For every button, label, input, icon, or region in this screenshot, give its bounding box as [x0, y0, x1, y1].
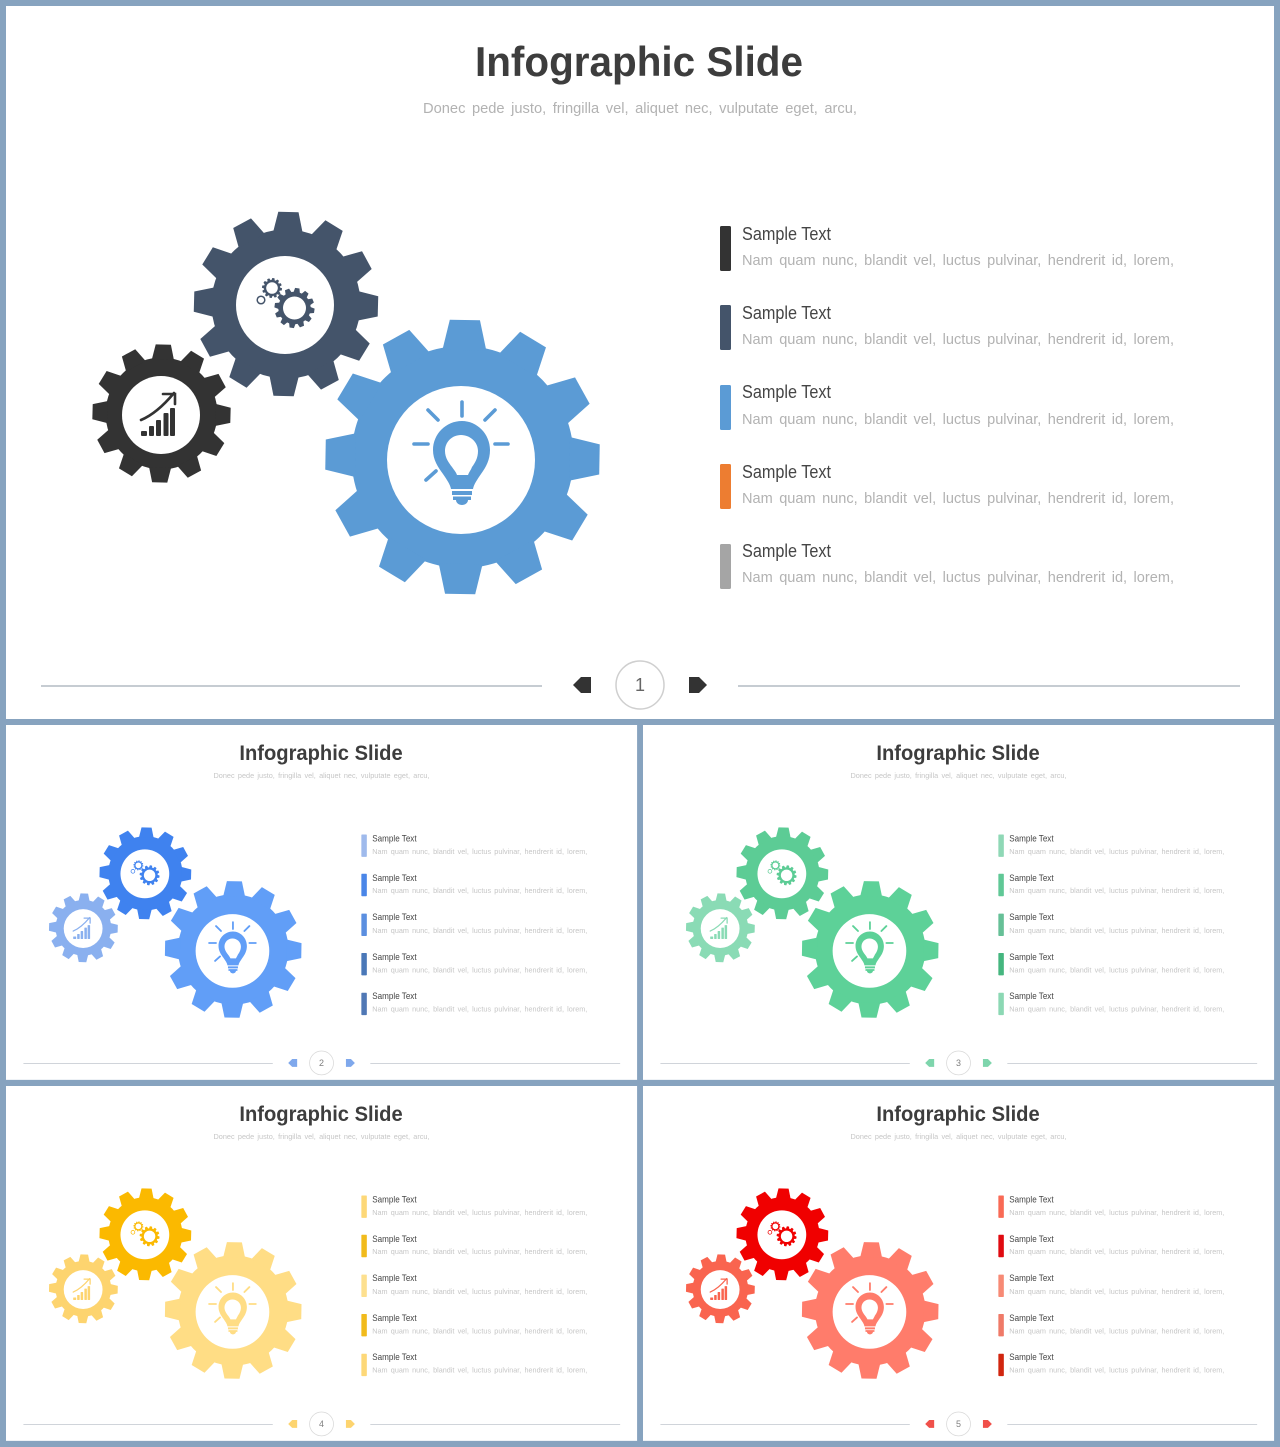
label: Sample Text	[372, 873, 417, 883]
icon: lightbulb	[846, 922, 893, 973]
icon: lightbulb	[209, 1283, 256, 1334]
description: Nam quam nunc, blandit vel, luctus pulvinar, hendrerit id, lorem,	[372, 1005, 587, 1014]
icon: growth chart	[73, 1279, 90, 1300]
panel: slide 1	[6, 6, 1274, 719]
description: Nam quam nunc, blandit vel, luctus pulvinar, hendrerit id, lorem,	[372, 965, 587, 974]
label: Sample Text	[1009, 991, 1054, 1001]
gear: cogs, medium	[735, 1187, 829, 1281]
label: Sample Text	[742, 382, 831, 402]
bar	[998, 1275, 1004, 1297]
description: Nam quam nunc, blandit vel, luctus pulvinar, hendrerit id, lorem,	[1009, 1366, 1224, 1375]
page number: 4	[319, 1419, 324, 1429]
gear: chart, small	[685, 893, 756, 963]
list item 4	[720, 462, 1174, 509]
icon: cogs	[768, 1221, 798, 1248]
bar	[361, 953, 367, 975]
gear: lightbulb, large	[164, 880, 303, 1019]
gear: cogs, medium	[735, 826, 829, 920]
label: Sample Text	[372, 1352, 417, 1362]
bar	[361, 1354, 367, 1376]
page number	[947, 1412, 970, 1436]
bar	[998, 874, 1004, 896]
icon: growth chart	[710, 1279, 727, 1300]
label: Sample Text	[372, 952, 417, 962]
list item 2	[361, 1234, 587, 1257]
list item 4	[998, 1313, 1224, 1336]
list item 5	[998, 1352, 1224, 1376]
bar	[998, 1235, 1004, 1257]
gear: lightbulb, large	[323, 318, 602, 596]
description: Nam quam nunc, blandit vel, luctus pulvinar, hendrerit id, lorem,	[742, 252, 1174, 269]
arrow: next	[689, 677, 707, 693]
title: Infographic Slide	[475, 38, 803, 85]
gear: lightbulb, large	[801, 1241, 940, 1380]
icon: growth chart	[710, 918, 727, 939]
panel: slide 3 green	[643, 725, 1274, 1080]
subtitle: Donec pede justo, fringilla vel, aliquet nec, vulputate eget, arcu,	[423, 100, 857, 117]
label: Sample Text	[1009, 873, 1054, 883]
bar	[998, 1195, 1004, 1218]
subtitle: Donec pede justo, fringilla vel, aliquet nec, vulputate eget, arcu,	[214, 771, 430, 780]
icon: cogs	[257, 277, 317, 331]
list item 1	[998, 1194, 1224, 1218]
icon: lightbulb	[846, 1283, 893, 1334]
description: Nam quam nunc, blandit vel, luctus pulvinar, hendrerit id, lorem,	[1009, 1005, 1224, 1014]
icon: growth chart	[73, 918, 90, 939]
icon: cogs	[131, 860, 161, 887]
label: Sample Text	[1009, 912, 1054, 922]
arrow: next	[346, 1059, 355, 1067]
description: Nam quam nunc, blandit vel, luctus pulvinar, hendrerit id, lorem,	[372, 926, 587, 935]
gear: chart, small	[48, 1254, 119, 1324]
list item 3	[720, 382, 1174, 430]
description: Nam quam nunc, blandit vel, luctus pulvinar, hendrerit id, lorem,	[742, 569, 1174, 586]
subtitle: Donec pede justo, fringilla vel, aliquet nec, vulputate eget, arcu,	[851, 1132, 1067, 1141]
description: Nam quam nunc, blandit vel, luctus pulvinar, hendrerit id, lorem,	[1009, 926, 1224, 935]
list item 2	[361, 873, 587, 896]
icon: growth chart	[141, 393, 175, 436]
list item 1	[361, 833, 587, 857]
label: Sample Text	[372, 1194, 417, 1204]
title: Infographic Slide	[239, 1103, 403, 1126]
description: Nam quam nunc, blandit vel, luctus pulvinar, hendrerit id, lorem,	[742, 331, 1174, 348]
bar	[361, 993, 367, 1015]
label: Sample Text	[372, 833, 417, 843]
page number: 3	[956, 1058, 961, 1068]
label: Sample Text	[742, 303, 831, 323]
bar	[720, 464, 731, 509]
gear: cogs, medium	[98, 826, 192, 920]
bar	[361, 1235, 367, 1257]
list item 5	[998, 991, 1224, 1015]
list item 5	[720, 541, 1174, 589]
description: Nam quam nunc, blandit vel, luctus pulvinar, hendrerit id, lorem,	[372, 1326, 587, 1335]
bar	[361, 1195, 367, 1218]
panel: slide 5 red	[643, 1086, 1274, 1441]
description: Nam quam nunc, blandit vel, luctus pulvinar, hendrerit id, lorem,	[742, 411, 1174, 428]
gear: chart, small	[685, 1254, 756, 1324]
bar	[998, 834, 1004, 857]
list item 5	[361, 1352, 587, 1376]
label: Sample Text	[1009, 1273, 1054, 1283]
page number: 5	[956, 1419, 961, 1429]
bar	[998, 953, 1004, 975]
bar	[998, 993, 1004, 1015]
description: Nam quam nunc, blandit vel, luctus pulvinar, hendrerit id, lorem,	[1009, 1287, 1224, 1296]
label: Sample Text	[1009, 1234, 1054, 1244]
description: Nam quam nunc, blandit vel, luctus pulvinar, hendrerit id, lorem,	[372, 847, 587, 856]
page number	[310, 1412, 333, 1436]
gear: chart, small	[91, 343, 232, 484]
panel: slide 4 yellow	[6, 1086, 637, 1441]
description: Nam quam nunc, blandit vel, luctus pulvinar, hendrerit id, lorem,	[372, 1247, 587, 1256]
subtitle: Donec pede justo, fringilla vel, aliquet nec, vulputate eget, arcu,	[851, 771, 1067, 780]
description: Nam quam nunc, blandit vel, luctus pulvinar, hendrerit id, lorem,	[1009, 1208, 1224, 1217]
label: Sample Text	[1009, 833, 1054, 843]
icon: lightbulb	[414, 402, 508, 505]
label: Sample Text	[372, 991, 417, 1001]
label: Sample Text	[1009, 952, 1054, 962]
bar	[720, 544, 731, 589]
label: Sample Text	[372, 1234, 417, 1244]
list item 1	[720, 224, 1174, 271]
arrow: next	[983, 1059, 992, 1067]
gear: cogs, medium	[98, 1187, 192, 1281]
list item 4	[361, 952, 587, 975]
list item 1	[361, 1194, 587, 1218]
description: Nam quam nunc, blandit vel, luctus pulvinar, hendrerit id, lorem,	[1009, 1326, 1224, 1335]
icon: lightbulb	[209, 922, 256, 973]
gear: cogs, medium	[192, 210, 380, 398]
icon: cogs	[131, 1221, 161, 1248]
label: Sample Text	[372, 1273, 417, 1283]
description: Nam quam nunc, blandit vel, luctus pulvinar, hendrerit id, lorem,	[1009, 1247, 1224, 1256]
arrow: previous	[925, 1059, 934, 1067]
bar	[720, 385, 731, 430]
page number	[616, 661, 664, 709]
bar	[998, 1354, 1004, 1376]
label: Sample Text	[1009, 1194, 1054, 1204]
list item 1	[998, 833, 1224, 857]
label: Sample Text	[742, 541, 831, 561]
list item 3	[361, 1273, 587, 1297]
title: Infographic Slide	[239, 742, 403, 765]
list item 2	[998, 873, 1224, 896]
bar	[720, 305, 731, 350]
arrow: next	[346, 1420, 355, 1428]
page number	[310, 1051, 333, 1075]
gear: lightbulb, large	[164, 1241, 303, 1380]
bar	[361, 1314, 367, 1336]
arrow: previous	[288, 1059, 297, 1067]
description: Nam quam nunc, blandit vel, luctus pulvinar, hendrerit id, lorem,	[372, 1208, 587, 1217]
arrow: previous	[573, 677, 591, 693]
arrow: next	[983, 1420, 992, 1428]
label: Sample Text	[372, 912, 417, 922]
description: Nam quam nunc, blandit vel, luctus pulvinar, hendrerit id, lorem,	[372, 1366, 587, 1375]
description: Nam quam nunc, blandit vel, luctus pulvinar, hendrerit id, lorem,	[1009, 965, 1224, 974]
description: Nam quam nunc, blandit vel, luctus pulvinar, hendrerit id, lorem,	[1009, 847, 1224, 856]
list item 3	[998, 1273, 1224, 1297]
label: Sample Text	[742, 224, 831, 244]
title: Infographic Slide	[876, 1103, 1040, 1126]
bar	[998, 1314, 1004, 1336]
bar	[361, 1275, 367, 1297]
description: Nam quam nunc, blandit vel, luctus pulvinar, hendrerit id, lorem,	[742, 490, 1174, 507]
icon: cogs	[768, 860, 798, 887]
bar	[361, 874, 367, 896]
gear: chart, small	[48, 893, 119, 963]
list item 2	[720, 303, 1174, 350]
title: Infographic Slide	[876, 742, 1040, 765]
panel: slide 2 blue	[6, 725, 637, 1080]
description: Nam quam nunc, blandit vel, luctus pulvinar, hendrerit id, lorem,	[372, 1287, 587, 1296]
subtitle: Donec pede justo, fringilla vel, aliquet nec, vulputate eget, arcu,	[214, 1132, 430, 1141]
list item 5	[361, 991, 587, 1015]
arrow: previous	[925, 1420, 934, 1428]
label: Sample Text	[372, 1313, 417, 1323]
list item 3	[361, 912, 587, 936]
label: Sample Text	[742, 462, 831, 482]
description: Nam quam nunc, blandit vel, luctus pulvinar, hendrerit id, lorem,	[372, 886, 587, 895]
bar	[361, 914, 367, 936]
arrow: previous	[288, 1420, 297, 1428]
page number	[947, 1051, 970, 1075]
bar	[361, 834, 367, 857]
list item 4	[361, 1313, 587, 1336]
label: Sample Text	[1009, 1313, 1054, 1323]
description: Nam quam nunc, blandit vel, luctus pulvinar, hendrerit id, lorem,	[1009, 886, 1224, 895]
list item 2	[998, 1234, 1224, 1257]
gear: lightbulb, large	[801, 880, 940, 1019]
label: Sample Text	[1009, 1352, 1054, 1362]
list item 4	[998, 952, 1224, 975]
page number: 1	[635, 675, 645, 695]
bar	[998, 914, 1004, 936]
page number: 2	[319, 1058, 324, 1068]
bar	[720, 226, 731, 271]
list item 3	[998, 912, 1224, 936]
